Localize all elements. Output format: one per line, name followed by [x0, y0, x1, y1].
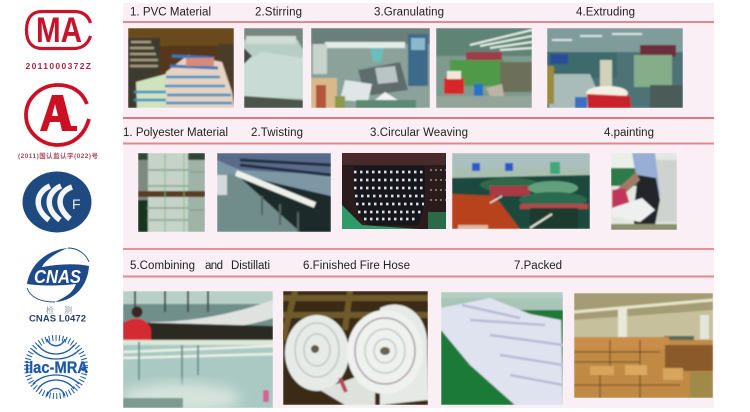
heading: row 3 labels: Distillati	[231, 260, 270, 272]
heading: row 3 labels: 5.Combining	[130, 260, 195, 272]
icon: CNAS logo	[27, 248, 89, 302]
photo: PVC material sacks	[128, 28, 234, 108]
heading: row 2 labels: 3.Circular Weaving	[370, 127, 468, 139]
heading: row 2 labels	[123, 127, 654, 139]
icon: CNAS logo: CNAS	[34, 267, 81, 287]
photo: stirring	[244, 28, 303, 108]
heading: row 1 labels: 3.Granulating	[374, 6, 444, 18]
heading: row 1 labels	[130, 6, 635, 18]
text: CAL number: (2011)国认监认字(022)号	[18, 151, 98, 160]
heading: row 3 labels: 7.Packed	[514, 260, 562, 272]
heading: row 2 labels: 1. Polyester Material	[123, 127, 228, 139]
photo: circular weaving bobbins	[342, 153, 446, 229]
photo: warehouse cartons	[574, 293, 713, 398]
icon: ilac-MRA logo	[25, 338, 88, 396]
photo: painting worker	[611, 153, 677, 230]
panel: process background	[123, 3, 714, 408]
heading: row 1 labels: 1. PVC Material	[130, 6, 211, 18]
text: CNAS mark: 检 测	[46, 305, 72, 315]
icon: CCC F logo	[22, 172, 92, 232]
photo: combining and distillation	[120, 291, 273, 412]
text: CMA number: 2011000372Z	[26, 61, 91, 71]
photo: granulating machine	[311, 28, 430, 108]
heading: row 1 labels: 4.Extruding	[576, 6, 635, 18]
icon: CCC F logo: F	[72, 196, 81, 212]
photo: circular weaving looms	[452, 153, 590, 229]
heading: row 2 labels: 2.Twisting	[251, 127, 303, 139]
icon: ilac-MRA logo: ilac-MRA	[25, 358, 88, 377]
heading: row 2 labels: 4.painting	[604, 127, 654, 139]
heading: row 3 labels: 6.Finished Fire Hose	[303, 260, 410, 272]
text: CNAS mark	[29, 305, 86, 324]
icon: CAL logo	[26, 85, 89, 145]
icon: CMA logo: MA	[36, 11, 82, 50]
photo: finished fire hose rolls	[283, 291, 428, 405]
text: CNAS mark: CNAS L0472	[29, 314, 86, 324]
photo: twisting machines	[217, 153, 331, 232]
heading: row 3 labels	[130, 260, 562, 272]
photo: extruding	[547, 28, 683, 108]
photo: granulating factory	[436, 28, 532, 108]
heading: row 3 labels: and	[205, 260, 223, 272]
heading: row 1 labels: 2.Stirring	[255, 6, 302, 18]
photo: polyester material	[138, 153, 205, 232]
photo: packed bags	[441, 292, 563, 405]
